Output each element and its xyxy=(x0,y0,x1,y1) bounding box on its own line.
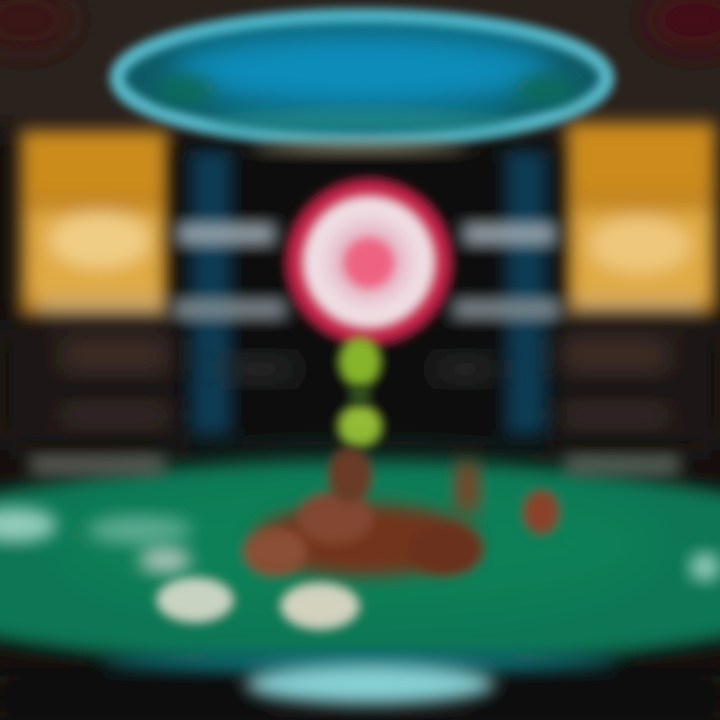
bottom table edge with cyan glow xyxy=(0,651,720,720)
panel: left glowing yellow screen xyxy=(20,130,168,316)
icon: green stacked markers xyxy=(338,337,382,447)
icon: brown chip pile xyxy=(243,447,559,576)
panel: central dark wall with blue columns xyxy=(60,150,670,445)
icon: overhead cyan ring light xyxy=(117,14,607,155)
panel: green poker table xyxy=(0,455,720,667)
panel: right glowing yellow screen xyxy=(566,122,716,314)
icon: white chips xyxy=(139,547,359,629)
icon: target bullseye xyxy=(286,179,452,345)
